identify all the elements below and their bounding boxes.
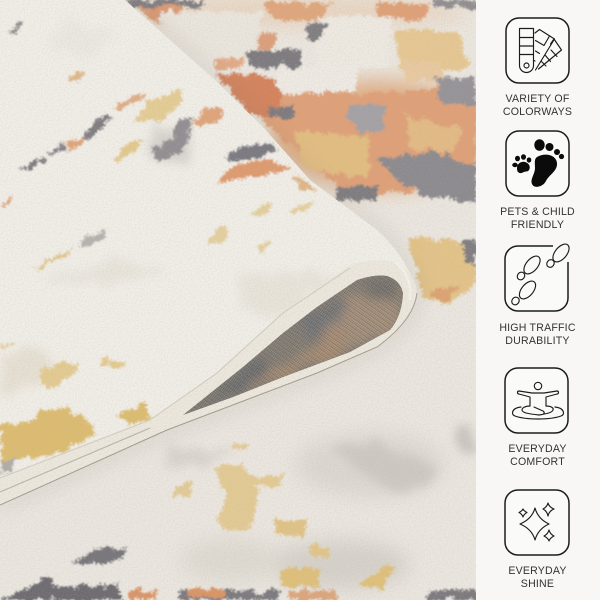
folded rug: underside bbox=[183, 276, 403, 415]
shadow under roll bbox=[0, 0, 417, 505]
feature: pets and child friendly: FRIENDLY bbox=[511, 219, 564, 231]
icon: sparkles bbox=[505, 490, 569, 555]
greys bbox=[125, 0, 205, 7]
rug edge binding bbox=[0, 261, 417, 505]
feature: everyday comfort: COMFORT bbox=[510, 456, 565, 468]
icon: paw and foot bbox=[506, 131, 569, 196]
feature: everyday shine bbox=[505, 490, 569, 590]
label: EVERYDAY bbox=[508, 443, 567, 455]
side panel bbox=[476, 0, 600, 600]
label: VARIETY OF bbox=[505, 93, 570, 105]
icon: footprints bbox=[505, 241, 572, 311]
feature: variety of colorways: COLORWAYS bbox=[503, 106, 572, 118]
feature: pets and child friendly bbox=[500, 131, 575, 231]
lower left yellow bbox=[0, 407, 96, 463]
feature: high traffic durability bbox=[499, 241, 576, 347]
feature: everyday shine: SHINE bbox=[521, 578, 554, 590]
folded rug: top pile surface bbox=[0, 0, 420, 510]
label: PETS & CHILD bbox=[500, 206, 575, 218]
feature: everyday comfort bbox=[505, 368, 568, 468]
top right colours bbox=[225, 85, 476, 192]
label: HIGH TRAFFIC bbox=[499, 322, 576, 334]
lower yellow and dark bbox=[172, 483, 190, 496]
label: EVERYDAY bbox=[508, 565, 567, 577]
feature: variety of colorways bbox=[503, 18, 572, 118]
feature: high traffic durability: DURABILITY bbox=[505, 335, 570, 347]
icon: colour swatch fan bbox=[506, 18, 569, 83]
icon: meditating figure bbox=[505, 368, 568, 433]
rug pile grain bbox=[0, 0, 476, 600]
